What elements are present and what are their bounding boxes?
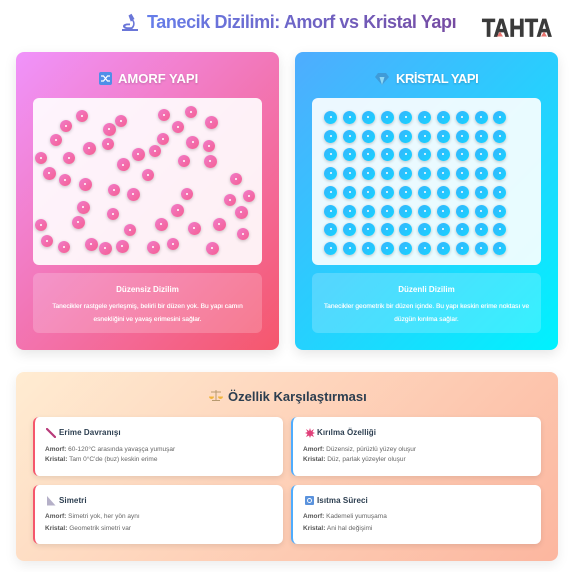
card: ısıtma süreci (291, 485, 541, 544)
icon: refresh square (305, 496, 314, 505)
info text: Tanecikler geometrik bir düzen içinde. Bu yapı keskin erime noktası ve düzgün kırılma sağlar. (324, 303, 529, 323)
heading: amorf: AMORF YAPI (118, 71, 198, 86)
panel: amorf (16, 52, 279, 350)
card line: amorf: Amorf: Düzensiz, pürüzlü yüzey oluşur (303, 446, 416, 453)
card title: Erime Davranışı (59, 428, 121, 437)
card line: kristal: Kristal: Tam 0°C'de (buz) keskin erime (45, 456, 157, 463)
card line: kristal: Kristal: Geometrik simetri var (45, 525, 131, 532)
logo: TAHTA: TAHTA (482, 15, 552, 42)
card title: Simetri (59, 496, 87, 505)
card: erime davranışı (33, 417, 283, 476)
info heading: Düzenli Dizilim (398, 285, 455, 294)
card line: amorf: Amorf: Kademeli yumuşama (303, 513, 387, 520)
particle box: amorf (33, 98, 262, 265)
heading: kristal: KRİSTAL YAPI (396, 71, 478, 86)
info box: amorf (33, 273, 262, 333)
card: kırılma özelliği (291, 417, 541, 476)
icon: thermometer (46, 428, 56, 438)
icon: burst (305, 428, 315, 438)
icon: scales (209, 390, 223, 401)
heading: comparison (209, 389, 367, 404)
card line: kristal: Kristal: Düz, parlak yüzeyler oluşur (303, 456, 406, 463)
particle grid: kristal (312, 98, 541, 265)
icon: microscope (122, 14, 138, 31)
card line: amorf: Amorf: Simetri yok, her yön aynı (45, 513, 140, 520)
info heading: Düzensiz Dizilim (116, 285, 179, 294)
panel: comparison (16, 372, 558, 561)
card: simetri (33, 485, 283, 544)
card line: kristal: Kristal: Ani hal değişimi (303, 525, 372, 532)
card title: Kırılma Özelliği (317, 428, 376, 437)
title (122, 12, 456, 32)
title text: Tanecik Dizilimi: Amorf vs Kristal Yapı (147, 12, 456, 32)
heading text: Özellik Karşılaştırması (228, 389, 367, 404)
card line: amorf: Amorf: 60-120°C arasında yavaşça yumuşar (45, 446, 175, 453)
icon: triangle ruler (47, 496, 56, 506)
info text: Tanecikler rastgele yerleşmiş, belirli bir düzen yok. Bu yapı camın esnekliğini ve yavaş erimesini sağlar. (52, 303, 243, 323)
panel: kristal (295, 52, 558, 350)
info box: kristal (312, 273, 541, 333)
card title: Isıtma Süreci (317, 496, 368, 505)
